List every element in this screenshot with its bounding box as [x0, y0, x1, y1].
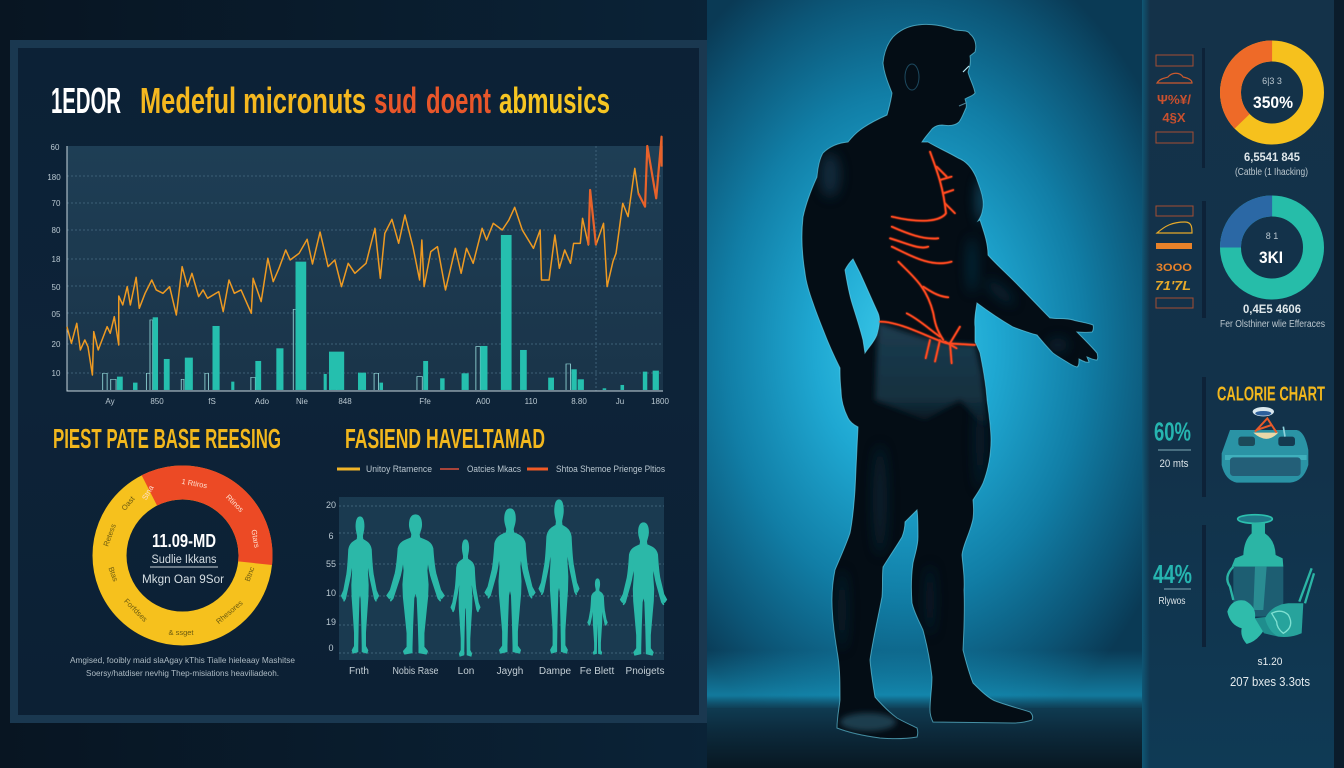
stat: 44 percent: 44% [1153, 559, 1192, 589]
legend: Oatcies Mkacs [467, 464, 521, 474]
segment labels: Btas [107, 566, 120, 583]
donut centre text: Mkgn Oan 9Sor [142, 574, 224, 586]
stat: 60 percent: 60% [1154, 416, 1191, 446]
x axis labels: Ay [105, 397, 115, 406]
human figures [342, 500, 667, 656]
legend [337, 464, 665, 474]
x axis labels: Nie [296, 397, 309, 406]
stat: 60 percent: 20 mts [1160, 458, 1189, 470]
footnote: Soersy/hatdiser nevhig Thep-misiations heaviliadeoh. [86, 668, 279, 678]
x axis labels: Ffe [419, 397, 431, 406]
chart: figures [326, 497, 667, 677]
donut chart: share two: 8 1 [1266, 231, 1278, 241]
panel: main dashboard [14, 44, 703, 719]
y axis labels: 180 [47, 173, 61, 182]
icon: bottle and food [1227, 515, 1314, 644]
x axis labels: 850 [150, 397, 164, 406]
figure names: Jaygh [497, 666, 523, 677]
figures y labels [326, 500, 336, 653]
title: sud [374, 80, 417, 121]
figure names: Fnth [349, 666, 369, 677]
donut centre text: Sudlie Ikkans [152, 554, 217, 566]
segment labels: Retess [101, 522, 118, 548]
figures y labels: 6 [328, 531, 334, 541]
segment labels: Oast [120, 494, 137, 512]
caption: share two [1220, 302, 1325, 330]
figure names: Lon [458, 666, 474, 677]
figures plot area [339, 497, 664, 660]
y axis labels: 70 [52, 199, 61, 208]
title: doent [426, 80, 491, 121]
x axis labels: 8.80 [571, 397, 587, 406]
stat: 44 percent [1153, 559, 1192, 607]
figure names [349, 666, 664, 677]
figure names: Fe Blett [580, 666, 614, 677]
figure names: Dampe [539, 666, 572, 677]
figures y labels: 0 [328, 643, 334, 653]
figure names: Pnoigets [626, 666, 664, 677]
segment labels: Forfdses [122, 597, 149, 624]
x axis labels: Ju [616, 397, 624, 406]
grid lines [67, 146, 663, 391]
glowing veins [880, 152, 975, 363]
y axis labels [47, 143, 61, 378]
legend: Unitoy Rtamence [366, 464, 432, 474]
x axis labels [105, 397, 669, 406]
figures y labels: 19 [326, 617, 336, 627]
y axis labels: 80 [52, 226, 61, 235]
icon: food box [1222, 407, 1308, 483]
segment labels: 1 Rtiros [181, 477, 208, 490]
segment labels: Rtinos [224, 493, 246, 514]
caption: bottom stats: 207 bxes 3.3ots [1230, 674, 1310, 689]
caption: share one: 6,5541 845 [1244, 150, 1300, 164]
footnote: Amgised, fooibly maid slaAgay kThis Tialle hieleaay Mashitse [70, 655, 295, 665]
donut chart: share one [1213, 34, 1331, 151]
caption: share two: Fer Olsthiner wlie Efferaces [1220, 319, 1325, 330]
stat: 60 percent [1154, 416, 1191, 470]
y axis labels: 60 [51, 143, 60, 152]
heading: figures chart: FASIEND HAVELTAMAD [345, 423, 545, 454]
donut centre text [142, 531, 224, 586]
foot detail [840, 713, 896, 731]
caption: bottom stats [1230, 656, 1310, 689]
x axis labels: Ado [255, 397, 270, 406]
stat: 44 percent: Rlywos [1158, 596, 1186, 607]
caption: share one: (Catble (1 Ihacking) [1235, 167, 1308, 178]
segment labels [101, 477, 262, 637]
x axis labels: 848 [338, 397, 352, 406]
y axis labels: 05 [52, 310, 61, 319]
figures y labels: 20 [326, 500, 336, 510]
icons: nutrition group two: 3OOO [1156, 262, 1192, 274]
panel: side metrics [1142, 0, 1344, 768]
icons: nutrition group two [1155, 206, 1193, 308]
y axis labels: 10 [52, 369, 61, 378]
title [51, 80, 610, 121]
icons: nutrition group one: 4§X [1162, 110, 1186, 125]
stage backdrop [707, 0, 1143, 768]
footnote [70, 655, 295, 678]
x axis labels: 110 [525, 397, 538, 406]
title: abmusics [499, 80, 610, 121]
donut chart: share two [1230, 206, 1314, 289]
figure names: Nobis Rase [392, 666, 439, 677]
x axis labels: 1800 [651, 397, 669, 406]
donut chart: base [84, 457, 281, 654]
donut chart: share one: 350% [1253, 93, 1293, 112]
axes [67, 146, 663, 391]
chart plot area [67, 146, 663, 391]
donut chart: share two: 3KI [1259, 248, 1283, 267]
caption: bottom stats: s1.20 [1258, 656, 1282, 668]
legend: Shtoa Shemoe Prienge Pltios [556, 464, 665, 474]
heading: ring chart: PIEST PATE BASE REESING [53, 423, 281, 454]
icons: nutrition group two: 71'7L [1155, 278, 1191, 293]
shorts [875, 322, 987, 430]
ear and face glints [905, 64, 969, 106]
x axis labels: fS [208, 397, 216, 406]
title: Medeful micronuts [140, 80, 366, 121]
segment labels: Btnc [243, 565, 257, 583]
icons: nutrition group one [1156, 55, 1193, 143]
segment labels: Gtars [249, 529, 262, 549]
y axis labels: 50 [52, 283, 61, 292]
illustration: man silhouette [802, 24, 1098, 739]
figures y labels: 10 [326, 588, 336, 598]
bars [103, 235, 659, 390]
x axis labels: A00 [476, 397, 491, 406]
line series [67, 137, 662, 375]
muscle highlights [820, 153, 1068, 731]
y axis labels: 20 [52, 340, 61, 349]
segment labels: Stna [140, 483, 156, 502]
caption: share one [1235, 150, 1308, 178]
donut centre text: 11.09-MD [152, 531, 216, 551]
dividers [1202, 48, 1206, 647]
y axis labels: 18 [52, 255, 61, 264]
caption: share two: 0,4E5 4606 [1243, 302, 1301, 316]
figures y labels: 55 [326, 559, 336, 569]
title: 1EDOR [51, 80, 121, 121]
segment labels: Rhesores [214, 598, 245, 626]
donut chart: share one: 6|3 3 [1262, 76, 1282, 86]
segment labels: & ssget [168, 628, 194, 637]
chart: line and bars [47, 137, 669, 406]
icons: nutrition group one: Ψ%¥/ [1157, 92, 1191, 107]
